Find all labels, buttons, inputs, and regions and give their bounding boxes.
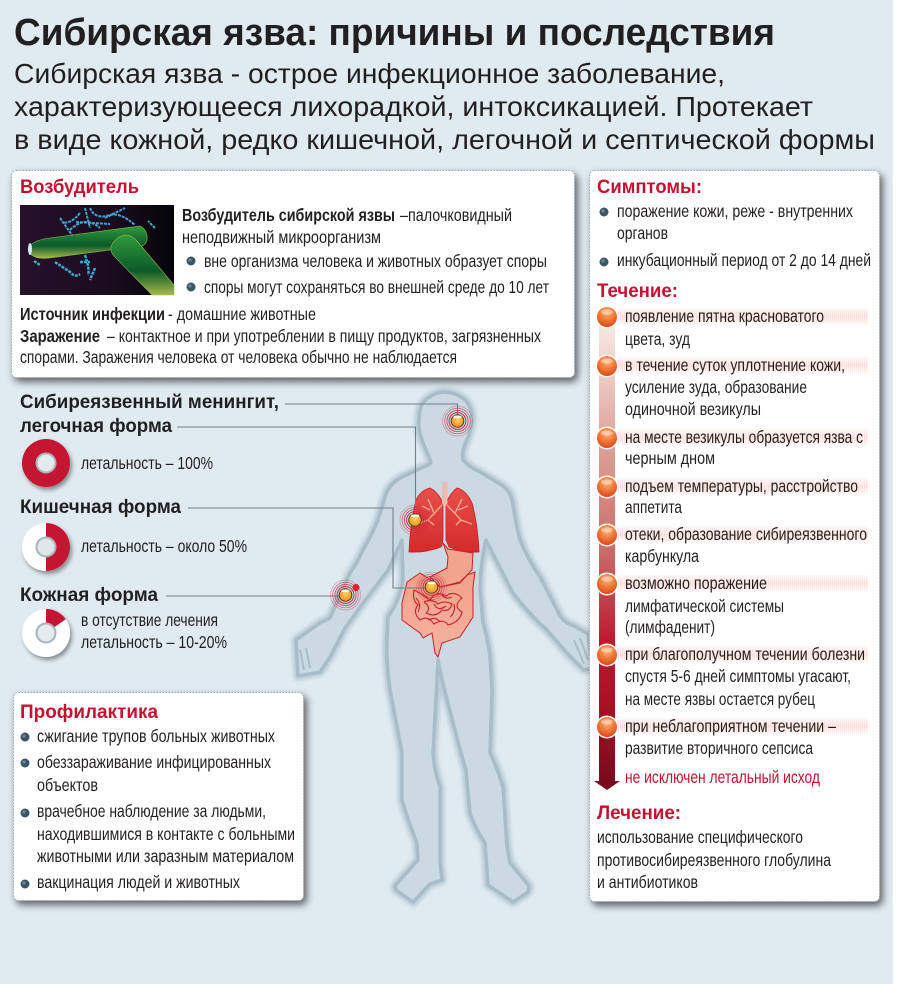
stage 1: появление пятна красноватого <box>625 306 824 326</box>
panel: prevention <box>14 692 304 900</box>
transmission: – контактное и при употреблении в пищу продуктов, загрязненных <box>107 326 541 346</box>
bullet: spores persist: споры могут сохраняться во внешней среде до 10 лет <box>204 277 549 297</box>
mortality text: летальность – 10-20% <box>81 632 227 652</box>
stage 4 <box>596 476 868 517</box>
target marker: lungs <box>400 505 430 535</box>
description: неподвижный микроорганизм <box>182 227 381 247</box>
description <box>182 205 512 247</box>
intro text: Сибирская язва - острое инфекционное заболевание, <box>14 58 725 89</box>
connector lines <box>166 404 458 596</box>
intro text <box>14 58 875 155</box>
stage 5: карбункула <box>625 546 699 566</box>
mortality text <box>81 610 227 652</box>
stage 4: аппетита <box>625 497 682 517</box>
panel: symptoms, course, treatment <box>590 170 880 902</box>
mortality text: летальность – около 50% <box>81 536 247 556</box>
intro text: характеризующееся лихорадкой, интоксикацией. Протекает <box>14 91 813 122</box>
stage 7 <box>596 644 868 709</box>
heading: causative agent: Возбудитель <box>20 177 139 198</box>
stage 5 <box>596 524 868 566</box>
transmission <box>20 326 541 367</box>
red spot on skin <box>352 584 360 591</box>
stage 2: усиление зуда, образование <box>625 377 807 397</box>
stage 8: при неблагоприятном течении – <box>625 716 836 736</box>
mortality text: в отсутствие лечения <box>81 610 218 630</box>
treatment text <box>597 827 831 892</box>
description: –палочковидный <box>400 205 512 225</box>
transmission: Заражение <box>20 326 100 346</box>
stage 1: цвета, зуд <box>625 329 690 349</box>
bullet: skin lesion: органов <box>617 223 668 243</box>
stage 8: развитие вторичного сепсиса <box>625 738 813 758</box>
title: Сибирская язва: причины и последствия <box>14 12 775 54</box>
intro text: в виде кожной, редко кишечной, легочной и септической формы <box>14 124 875 155</box>
stomach and intestines <box>402 543 475 657</box>
stage 6: возможно поражение <box>625 573 767 593</box>
source of infection <box>20 304 316 324</box>
source of infection: - домашние животные <box>168 304 316 324</box>
label: meningitis: Сибиреязвенный менингит, <box>20 392 279 413</box>
treatment text: использование специфического <box>597 827 803 847</box>
mortality text: летальность – 100% <box>81 453 213 473</box>
target marker: intestine <box>416 572 446 602</box>
stage 2: одиночной везикулы <box>625 399 761 419</box>
label: intestinal: Кишечная форма <box>20 497 181 518</box>
label: pulmonary: легочная форма <box>20 416 172 437</box>
stage 6 <box>596 572 868 637</box>
bullet: spores form: вне организма человека и животных образует споры <box>204 251 547 271</box>
progression arrow <box>594 317 620 790</box>
description: Возбудитель сибирской язвы <box>182 205 395 225</box>
stage 1 <box>596 306 868 349</box>
panel: causative agent <box>12 170 574 378</box>
form: meningitis and pulmonary <box>20 392 279 487</box>
heading: prevention: Профилактика <box>20 702 158 723</box>
bullet: vaccination: вакцинация людей и животных <box>37 872 240 892</box>
photo: bacteria <box>20 205 174 295</box>
target marker: brain <box>442 406 472 436</box>
heading: course: Течение: <box>597 281 678 302</box>
donut: 100% <box>22 439 70 487</box>
donut: 10-20% <box>22 609 70 657</box>
fatal outcome note: не исключен летальный исход <box>625 767 820 787</box>
stage 8 <box>596 716 868 758</box>
stage 6: (лимфаденит) <box>625 617 715 637</box>
target marker: skin <box>330 580 360 610</box>
bullet: disinfection <box>20 752 271 795</box>
heading: treatment: Лечение: <box>597 803 681 824</box>
stage 2 <box>596 354 868 419</box>
stage 3 <box>596 426 868 468</box>
bullet: disinfection: обеззараживание инфицированных <box>37 752 271 772</box>
treatment text: и антибиотиков <box>597 872 698 892</box>
form: cutaneous <box>20 585 227 657</box>
stage 7: на месте язвы остается рубец <box>625 689 815 709</box>
form: intestinal <box>20 497 247 571</box>
human body figure <box>166 392 592 902</box>
bullet: monitoring <box>20 801 295 866</box>
bullet: disinfection: объектов <box>37 775 98 795</box>
bullet: skin lesion <box>600 201 853 243</box>
body silhouette <box>296 392 592 902</box>
label: cutaneous: Кожная форма <box>20 585 158 606</box>
treatment text: противосибиреязвенного глобулина <box>597 850 831 870</box>
stage 3: черным дном <box>625 448 715 468</box>
donut: 50% <box>22 523 70 571</box>
lungs <box>409 482 479 552</box>
bullet: monitoring: врачебное наблюдение за людьми, <box>37 801 266 821</box>
bullet: monitoring: животными или заразным материалом <box>37 846 294 866</box>
transmission: спорами. Заражения человека от человека обычно не наблюдается <box>20 347 457 367</box>
bullet: monitoring: находившимися в контакте с больными <box>37 824 295 844</box>
stage 6: лимфатической системы <box>625 596 784 616</box>
stage 2: в течение суток уплотнение кожи, <box>625 355 845 375</box>
heading: symptoms: Симптомы: <box>597 177 702 198</box>
source of infection: Источник инфекции <box>20 304 165 324</box>
bullet: burning: сжигание трупов больных животных <box>37 726 275 746</box>
